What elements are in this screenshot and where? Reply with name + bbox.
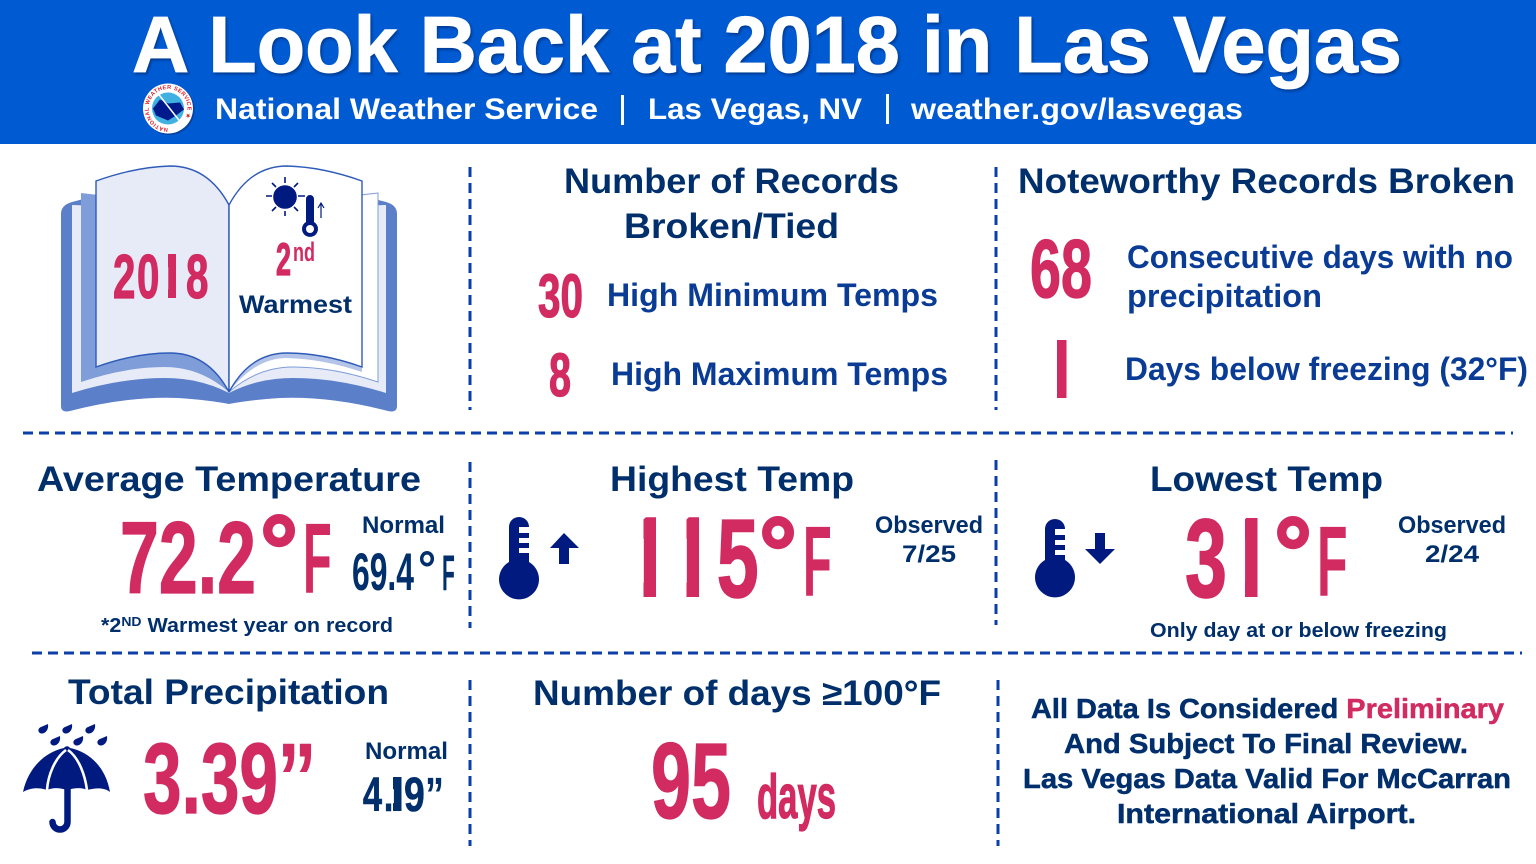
divider: middle column 2 — [994, 460, 998, 625]
panel: lowest temp — [1035, 460, 1506, 642]
stat: 8: 8 — [549, 341, 571, 409]
icon: open book: nd — [293, 237, 315, 267]
stat: 72.2 degrees: ° — [260, 495, 298, 607]
heading: Average Temperature — [37, 460, 421, 499]
normal value: ” — [425, 769, 444, 822]
normal value: 69.4 — [352, 543, 414, 602]
stat: 115 degrees — [644, 516, 830, 599]
normal value: 1 — [388, 767, 407, 821]
stat: 31 degrees: F — [1317, 505, 1348, 618]
subtitle: location: Las Vegas, NV — [648, 93, 862, 126]
stat: 1: 1 — [1038, 322, 1085, 417]
label: precipitation: precipitation — [1127, 278, 1322, 314]
normal value: 9 — [404, 769, 425, 822]
divider: bottom column 1 — [468, 680, 472, 846]
book label: 2nd: 2 — [276, 234, 291, 285]
normal label: Normal — [365, 738, 448, 765]
note line 4: International Airport. — [1117, 798, 1416, 829]
stat: 115 degrees: F — [803, 505, 832, 618]
note line 3: Las Vegas Data Valid For McCarran — [1023, 763, 1511, 794]
panel: average temperature — [37, 460, 455, 637]
normal label: Normal — [362, 512, 445, 539]
label: high minimum temps: High Minimum Temps — [607, 277, 938, 313]
icon: umbrella with rain — [23, 724, 110, 829]
note line 1: All Data Is Considered Preliminary — [1031, 693, 1504, 724]
unit: days: days — [757, 763, 836, 832]
icon: NWS logo: NATIONAL WEATHER SERVICE ★ — [144, 85, 192, 132]
icon: open book — [61, 166, 397, 411]
stat: 68: 68 — [1030, 222, 1092, 315]
footnote: ND — [121, 614, 142, 629]
divider: top column 1 — [468, 167, 472, 410]
stat: 31 degrees: ° — [1274, 497, 1312, 609]
book label: year: 2018 — [113, 243, 208, 312]
icon: sun — [266, 177, 305, 216]
icon: thermometer with up arrow — [499, 517, 579, 599]
title: A Look Back at 2018 in Las Vegas — [132, 0, 1402, 89]
stat: 31 degrees — [1186, 516, 1346, 599]
stat: 72.2 degrees: F — [303, 502, 332, 615]
divider: row 1 — [23, 432, 1513, 434]
subtitle: website: weather.gov/lasvegas — [910, 93, 1243, 126]
panel: number of records — [538, 162, 948, 409]
right page — [229, 166, 362, 392]
left page — [96, 166, 229, 392]
panel: days at or above 100 — [533, 674, 941, 841]
heading: Lowest Temp — [1150, 460, 1383, 499]
divider: top column 2 — [994, 167, 998, 410]
panel: noteworthy records — [1020, 168, 1526, 398]
heading line 2: Broken/Tied — [624, 207, 839, 246]
observed label: Observed — [1398, 512, 1506, 539]
label: days below freezing: Days below freezing (32°F) — [1125, 351, 1528, 387]
normal value: 4. — [363, 767, 393, 821]
note: Only day at or below freezing — [1150, 620, 1447, 642]
stat: 95: 95 — [651, 720, 731, 841]
panel: preliminary data note — [1023, 693, 1511, 829]
label: high maximum temps: High Maximum Temps — [611, 356, 948, 392]
stat: 3.39 inches: 3.39 — [143, 723, 278, 835]
normal value: F — [442, 546, 455, 602]
heading: Highest Temp — [610, 460, 854, 499]
heading: Number of days ≥100°F — [533, 674, 941, 713]
footnote: Warmest year on record — [142, 615, 393, 637]
note line 2: And Subject To Final Review. — [1064, 728, 1468, 759]
icon: thermometer up — [302, 195, 324, 237]
stat: 3.39 inches: ” — [277, 723, 317, 835]
panel: highest temp — [499, 466, 982, 600]
subtitle: organisation: National Weather Service — [215, 93, 598, 126]
heading: Number of Records — [564, 162, 899, 201]
divider: row 2 — [32, 652, 1522, 654]
panel: total precipitation — [23, 673, 448, 835]
heading: Noteworthy Records Broken — [1018, 162, 1515, 201]
heading: Total Precipitation — [68, 673, 389, 712]
stat: 31 degrees: 31 — [1185, 498, 1271, 622]
normal value: ° — [418, 542, 436, 598]
stat: 72.2 degrees: 72.2 — [120, 501, 256, 615]
label: consecutive days: Consecutive days with no — [1127, 239, 1513, 275]
stat: 30: 30 — [538, 262, 583, 330]
observed label: Observed — [875, 512, 983, 539]
divider: bottom column 2 — [996, 680, 1000, 846]
observed date: 7/25 — [902, 541, 956, 568]
observed date: 2/24 — [1425, 541, 1480, 568]
stat: 115 degrees: ° — [759, 497, 797, 609]
divider: middle column 1 — [468, 462, 472, 628]
icon: thermometer with down arrow — [1035, 519, 1115, 597]
header banner — [0, 0, 1536, 144]
book label: warmest: Warmest — [239, 291, 353, 319]
stat: 115 degrees: 115 — [628, 498, 759, 622]
footnote: *2 — [101, 615, 120, 637]
normal value — [363, 777, 442, 812]
